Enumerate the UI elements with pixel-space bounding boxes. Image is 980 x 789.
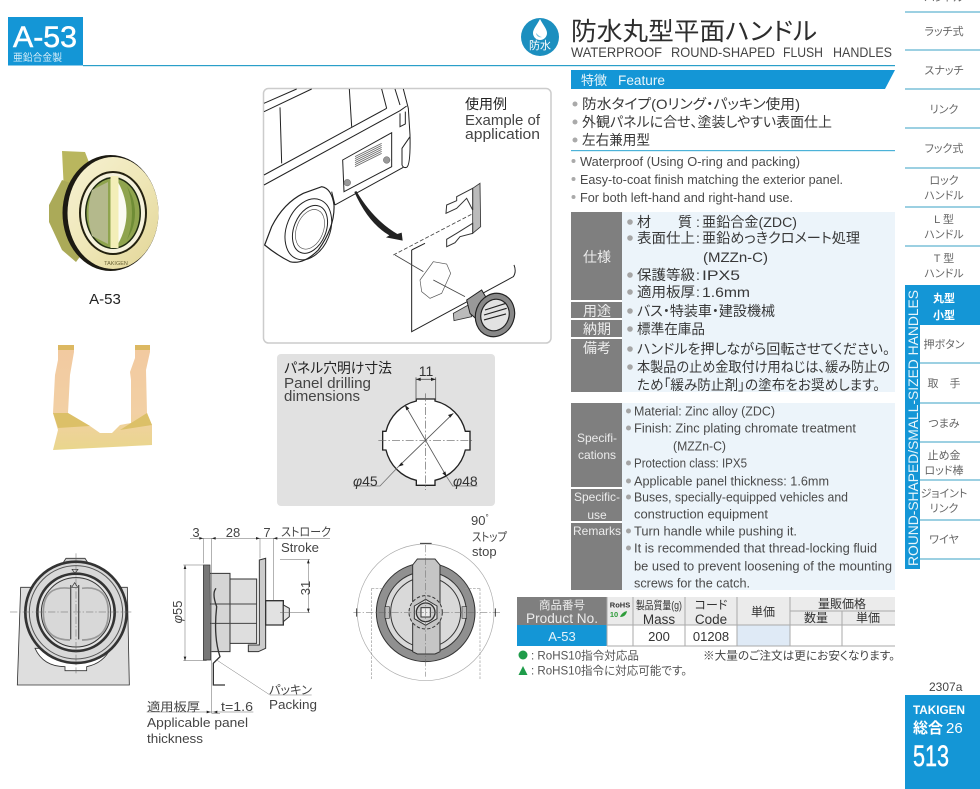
feature bar: Feature [618,73,665,88]
price table: 200 [648,629,670,644]
features english [572,155,843,205]
label: 90 degree stop: 90 [471,513,485,528]
page number block: 26 [946,720,963,737]
spec table japanese: : [696,284,700,300]
features english: Waterproof (Using O-ring and packing) [580,155,800,169]
caption: example of application: 使用例 [465,96,507,112]
spec table english: Material: Zinc alloy (ZDC) [634,404,775,418]
feature bar [571,70,895,89]
spec table japanese: IPX5 [702,267,740,283]
spec table english: construction equipment [634,508,769,522]
spec table japanese: 納期 [583,321,611,337]
heading: panel drilling dimensions: dimensions [284,388,360,405]
sidebar navigation: ラッチ式 [924,25,964,38]
sidebar navigation: L 型 [934,212,954,226]
label: 90 degree stop: stop [472,544,497,559]
price table: 単価 [751,605,775,619]
sidebar navigation: リンク [930,502,958,515]
header badge: A-53: A-53 [13,21,77,54]
features english: For both left-hand and right-hand use. [580,191,793,205]
spec table english: cations [578,448,616,462]
sidebar navigation: ハンドル [924,268,964,280]
price table: 商品番号 [539,599,585,612]
spec table japanese: バス・特装車・建設機械 [637,303,775,319]
sidebar navigation: ロック [929,174,959,187]
waterproof icon [521,18,559,56]
spec table japanese [571,212,895,393]
dimension labels: side view: Applicable panel [147,715,248,730]
dimension labels: side view: 3 [192,525,200,540]
sidebar navigation: T 型 [934,251,954,265]
photo: handle A-53 [49,151,158,271]
sidebar navigation: 押ボタン [924,337,965,351]
sidebar navigation: 取 手 [928,376,960,390]
heading: panel drilling dimensions: Panel drilling [284,375,371,392]
spec table japanese: 本製品の止め金取付け用ねじは、緩み防止の [637,359,890,375]
dimension labels: side view: 31 [298,581,313,595]
footnotes [518,648,895,678]
features english: Easy-to-coat finish matching the exterior panel. [580,173,843,187]
sidebar navigation: つまみ [928,417,960,430]
dimension labels: side view: φ55 [170,601,185,623]
title: FLUSH [783,44,823,60]
spec table japanese: 用途 [583,303,611,319]
spec table english: Turn handle while pushing it. [634,524,797,538]
spec table english: Remarks [573,524,621,538]
spec table japanese: 質 [678,214,692,230]
sidebar navigation: ロッド棒 [924,464,964,477]
sidebar navigation: 小型 [933,309,955,322]
spec table japanese: 仕様 [583,249,611,265]
spec table english: Specifi- [577,431,617,445]
price table: 10 [610,610,618,619]
price table: 01208 [693,629,729,644]
drawing: front view [10,553,133,685]
spec table english: screws for the catch. [634,576,750,590]
panel: drilling dimensions [277,354,495,506]
illustration: van and handle installation [264,89,521,342]
title [571,18,892,60]
sidebar navigation: ジョイント [921,488,967,500]
price table: A-53 [548,629,576,644]
dimension labels: side view: thickness [147,731,204,746]
spec table english: Applicable panel thickness: 1.6mm [634,474,829,488]
title: HANDLES [833,44,892,60]
caption: example of application [465,96,541,143]
features japanese: 外観パネルに合せ、塗装しやすい表面仕上 [582,114,832,130]
dimension labels: side view: ストローク [281,525,331,539]
spec table japanese: 標準在庫品 [637,321,705,337]
spec table english: Protection class: IPX5 [634,456,747,470]
footnotes: : RoHS10指令に対応可能です。 [531,664,687,678]
label: 90 degree stop: ° [485,513,489,522]
spec table japanese: : [696,214,700,230]
spec table english: (MZZn-C) [673,440,726,454]
spec table japanese: ハンドルを押しながら回転させてください。 [637,341,890,357]
spec table japanese: : [696,267,700,283]
price table [517,596,895,646]
price table: コード [695,598,727,612]
heading: panel drilling dimensions: パネル穴明け寸法 [284,360,392,376]
dimension labels: side view [147,525,331,746]
label: 90 degree stop: ストップ [472,530,507,544]
footnotes: : RoHS10指令対応品 [531,648,639,662]
price table: 量販価格 [818,596,866,611]
sidebar dividers [905,12,980,559]
page number block [905,695,980,789]
dimension labels: φ45 [353,473,378,489]
panel: example of application [264,88,551,343]
price table: RoHS [610,600,630,610]
features japanese: 防水タイプ(Oリング・パッキン使用) [582,96,800,112]
sidebar navigation: ワイヤ [929,534,959,546]
spec table english: Buses, specially-equipped vehicles and [634,490,848,504]
spec table japanese: 表面仕上 [637,230,695,246]
dimension labels: side view: Stroke [281,540,319,555]
price table: Code [695,612,727,627]
dimension labels: 11 [419,363,433,379]
active tab [905,285,980,569]
feature bar: 特徴 [581,73,607,88]
title: WATERPROOF [571,44,662,60]
dimension labels: side view: 適用板厚 [147,700,200,714]
header badge: A-53: 亜鉛合金製 [13,51,62,64]
dimension labels: side view: 28 [226,525,240,540]
spec table english: It is recommended that thread-locking fluid [634,542,877,556]
spec table japanese: 亜鉛合金(ZDC) [702,214,797,230]
dimension labels: side view: 7 [263,525,271,540]
title: ROUND-SHAPED [671,44,775,60]
diagram: drilling hole [353,377,477,490]
sidebar navigation: 止め金 [928,449,960,462]
dimension labels: side view: t=1.6 [221,699,253,714]
waterproof icon: 防水 [529,38,551,52]
photo: handle A-53: TAKIGEN [104,261,128,267]
revision code: 2307a [929,680,963,694]
heading: panel drilling dimensions [284,360,392,405]
spec table english: be used to prevent loosening of the mounting [634,560,892,574]
sidebar navigation: フック式 [925,142,963,155]
spec table english: Finish: Zinc plating chromate treatment [634,422,857,436]
sidebar navigation: ROUND-SHAPED/SMALL-SIZED HANDLES [906,290,921,566]
spec table japanese: 保護等級 [637,267,695,283]
spec table japanese: ため「緩み防止剤」の塗布をお奨めします。 [637,377,880,393]
price table: 単価 [856,611,880,625]
sidebar navigation: 丸型 [933,291,955,305]
dimension labels: side view: Packing [269,697,317,712]
spec table japanese: 備考 [583,340,611,356]
dimension labels: φ48 [453,473,478,489]
label: 90 degree stop [471,513,507,559]
dimension labels: side view: パッキン [269,683,313,697]
sidebar navigation [905,0,980,569]
label: A-53: A-53 [89,291,121,308]
spec table english: Specific- [574,490,620,504]
sidebar navigation: ハンドル [924,190,964,202]
photo: catch clip [53,345,152,450]
spec table japanese: 1.6mm [702,284,750,300]
features japanese: 左右兼用型 [582,132,650,148]
drawing: rear view [353,513,507,681]
sidebar navigation: リンク [930,103,958,116]
page number block: TAKIGEN [913,705,965,717]
dimension labels [353,363,478,489]
spec table japanese: (MZZn-C) [703,249,768,265]
page number block: 総合 [913,720,943,737]
price table: Mass [643,612,675,627]
sidebar navigation: スナッチ [924,64,964,77]
sidebar navigation: ハンドル [924,229,964,241]
spec table english [571,403,895,590]
price table: 製品質量(g) [636,598,682,612]
header badge: A-53 [8,17,83,66]
spec table japanese: : [696,230,700,246]
caption: example of application: Example of [465,112,541,129]
features japanese [572,96,832,148]
caption: example of application: application [465,126,540,143]
price table: 数量 [804,610,828,625]
drawing: side view [147,525,331,746]
spec table english: use [587,508,607,522]
title: 防水丸型平面ハンドル [571,18,817,46]
price table: Product No. [526,611,598,626]
spec table japanese: 適用板厚 [637,284,695,300]
spec table japanese: 亜鉛めっきクロメート処理 [702,230,860,246]
footnotes: ※大量のご注文は更にお安くなります。 [703,648,895,662]
page number block: 513 [913,740,949,773]
spec table japanese: 材 [637,214,651,230]
